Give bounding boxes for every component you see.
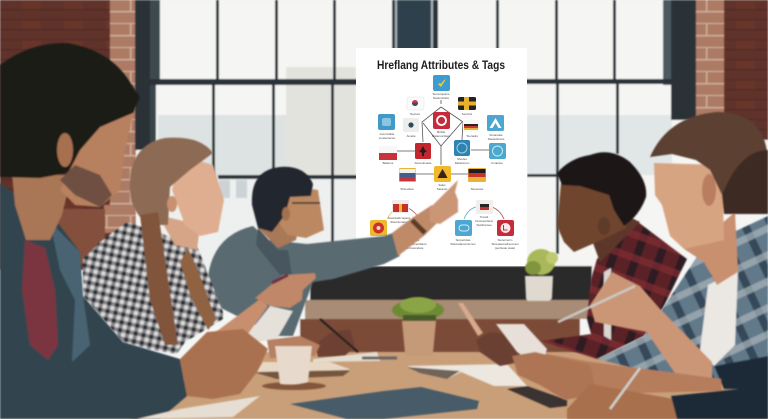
- icon: grey box: [403, 118, 419, 132]
- brick wall left: [0, 0, 136, 270]
- poster tiny labels: Sales: [438, 183, 446, 187]
- red t-shirt: [22, 240, 58, 360]
- icon: red L badge: [497, 220, 514, 236]
- poster: [356, 48, 527, 266]
- dark upper sleeve: [714, 356, 768, 389]
- brick wall right: [695, 0, 768, 140]
- distant building through window: [158, 67, 672, 268]
- icon: blue clock badge: [455, 220, 472, 236]
- torso and sleeve: [208, 226, 400, 336]
- coffee cup: [275, 346, 312, 385]
- icon: check badge: [433, 75, 450, 91]
- extended arm: [205, 299, 268, 345]
- poster tiny labels: Nostrinalh tapass: [388, 216, 411, 220]
- white tee: [700, 270, 738, 366]
- brick below ledge: [300, 319, 580, 354]
- plant on table: [392, 297, 444, 356]
- poster tiny labels: Nectors: [410, 112, 421, 116]
- poster title: Hreflang Attributes & Tags: [377, 60, 505, 72]
- icon: blue globe: [454, 140, 470, 156]
- poster tiny labels: Sunaroate: [489, 133, 503, 137]
- poster tiny labels: (perrinate state): [495, 246, 515, 250]
- poster tiny labels: Nautorshiws: [433, 96, 450, 100]
- poster tiny labels: Transit: [480, 215, 489, 219]
- poster tiny labels: Stautoshions: [488, 137, 505, 141]
- poster tiny labels: Adnonkmade: [414, 161, 432, 165]
- icon: Polish flag: [379, 146, 397, 160]
- hands on table: [512, 352, 597, 400]
- neck: [590, 215, 640, 262]
- icon: small flag bottom right: [476, 200, 493, 214]
- poster tiny labels: Gvermalide: [380, 132, 395, 136]
- poster tiny labels: Stantolunaloy: [390, 220, 408, 224]
- hair: [252, 167, 313, 232]
- coaster: [262, 382, 326, 390]
- pen in foreground: [610, 368, 640, 409]
- icon: red and yellow flag: [392, 200, 409, 213]
- icon: German flag: [468, 168, 486, 182]
- tablet in hand: [496, 324, 547, 369]
- pointing hand: [255, 273, 316, 308]
- pen: [558, 286, 635, 322]
- table items front: [253, 352, 479, 419]
- wrist watch: [412, 220, 425, 233]
- icon: yellow circle badge: [370, 220, 387, 236]
- neck: [684, 212, 738, 285]
- hand: [180, 329, 268, 399]
- poster tiny labels: Sevchot: [462, 112, 472, 116]
- neck: [158, 215, 200, 250]
- face: [557, 183, 626, 252]
- poster tiny labels: Semorspaine: [432, 92, 450, 96]
- poster tiny labels: Undertes: [491, 161, 503, 165]
- right paper: [313, 352, 380, 362]
- icon: yellow bell: [434, 166, 451, 182]
- hair: [650, 112, 768, 214]
- glasses: [292, 202, 320, 204]
- hair: [557, 152, 646, 226]
- poster tiny labels: Startlionsee: [476, 223, 492, 227]
- terracotta pot: [402, 321, 436, 356]
- hair: [130, 138, 213, 225]
- poster tiny labels: [379, 92, 519, 250]
- poster tiny labels: senwortersio: [379, 136, 396, 140]
- icon: light blue arrow badge: [489, 143, 506, 159]
- notebook on table: [407, 364, 567, 408]
- plant on window sill: [525, 249, 558, 301]
- dark sleeve: [671, 386, 768, 419]
- poster tiny labels: Sorpertolas: [456, 238, 471, 242]
- woman with braid: [83, 138, 320, 358]
- face: [172, 155, 224, 236]
- braid: [140, 212, 178, 345]
- poster tiny labels: Balarme: [383, 161, 394, 165]
- icon: yellow cross flag: [458, 97, 476, 110]
- poster tiny labels: Amelia: [407, 134, 416, 138]
- notes under hand: [137, 396, 260, 419]
- icon: blue A badge: [487, 115, 504, 131]
- table: [130, 352, 768, 419]
- denim jacket: [0, 183, 187, 419]
- poster tiny labels: Stereznorm: [498, 238, 513, 242]
- icon: red badge: [433, 112, 450, 129]
- glasses on table: [362, 356, 397, 360]
- far hand by cup: [267, 336, 320, 358]
- poster tiny labels: Mobile: [437, 130, 446, 134]
- clipboard: [253, 369, 352, 379]
- neck: [258, 205, 300, 248]
- icon: red emblem: [415, 143, 431, 159]
- icon: small German flag: [463, 120, 479, 132]
- cream paper: [256, 362, 352, 372]
- phone hand: [476, 332, 540, 366]
- poster tiny labels: Shlessdanorctomon: [450, 242, 476, 246]
- raised forearm: [392, 205, 445, 256]
- man on far right: [496, 112, 768, 419]
- foliage: [392, 297, 444, 321]
- face: [654, 163, 724, 249]
- poster tiny labels: Shioudiew: [400, 187, 415, 191]
- pink pen: [272, 275, 288, 283]
- gingham shirt: [83, 222, 223, 354]
- poster tiny labels: Sostrinatimentbarto: [401, 242, 427, 246]
- blue notebook: [290, 387, 479, 419]
- plaid shirt: [597, 216, 768, 380]
- foliage: [525, 249, 558, 275]
- centre man pointing at the poster: [208, 167, 458, 357]
- ledge: [305, 300, 590, 319]
- pointing hand: [430, 180, 458, 224]
- poster connector lines: [387, 100, 504, 220]
- poster tiny labels: Stormsiondare: [405, 246, 424, 250]
- poster tiny labels: Stenessie: [471, 187, 484, 191]
- plaid shirt: [541, 219, 687, 359]
- man with afro, right of poster: [458, 152, 687, 366]
- raised hand and forearm: [590, 272, 712, 379]
- icon: Russian flag: [399, 168, 416, 182]
- poster tiny labels: Sandtas: [409, 238, 420, 242]
- poster tiny labels: Shodes: [457, 157, 467, 161]
- face: [60, 113, 133, 207]
- icon: Korean flag: [407, 97, 424, 110]
- lower window sill frame: [310, 266, 592, 301]
- undershirt: [604, 268, 611, 340]
- white pot: [525, 276, 553, 301]
- hand with pen: [315, 329, 355, 357]
- hair: [0, 43, 140, 178]
- face: [278, 185, 324, 238]
- poster icons: [370, 75, 514, 236]
- window frame: [135, 0, 696, 265]
- poster tiny labels: Centoscolians: [475, 219, 494, 223]
- lower forearm: [537, 352, 722, 399]
- poster tiny labels: Matamonitiant: [432, 134, 450, 138]
- poster tiny labels: Skonjaiemetheronesi: [492, 242, 519, 246]
- poster tiny labels: Daltstomen: [455, 161, 470, 165]
- man in foreground left: [0, 43, 268, 419]
- icon: blue hand: [378, 114, 395, 130]
- tablet held by man: [248, 306, 293, 342]
- poster tiny labels: Toerasks: [466, 134, 478, 138]
- poster tiny labels: Sassnet: [437, 187, 447, 191]
- table strip under lower hand: [567, 384, 677, 419]
- neck: [12, 175, 72, 240]
